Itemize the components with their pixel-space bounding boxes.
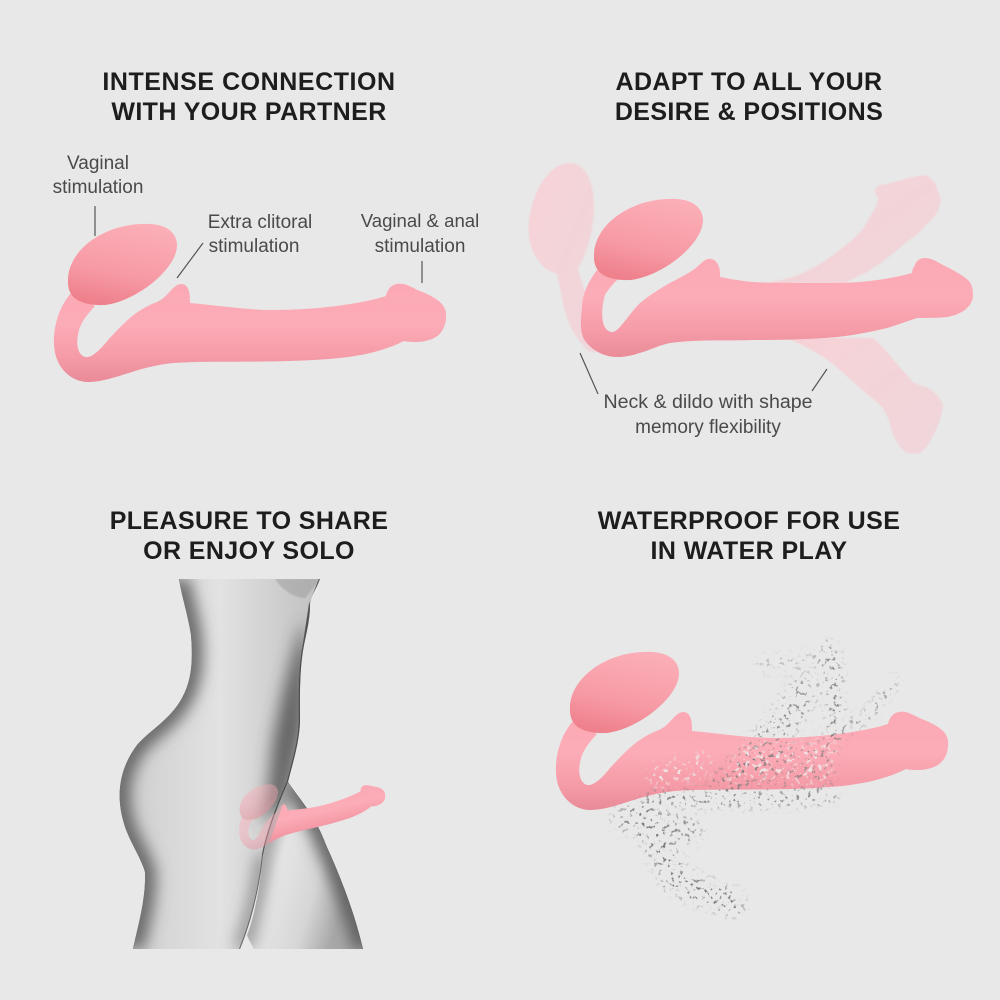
panel: adapt to positions — [529, 68, 973, 454]
heading: pleasure to share: OR ENJOY SOLO — [143, 537, 355, 565]
figure: grey body silhouette — [110, 575, 370, 955]
product worn, visible part — [269, 785, 386, 843]
label: neck and dildo flexibility: memory flexibility — [635, 417, 781, 438]
product worn, translucent part — [230, 759, 391, 852]
heading: pleasure to share: PLEASURE TO SHARE — [110, 507, 388, 535]
product illustration — [556, 652, 948, 810]
label: vaginal and anal stimulation — [361, 210, 479, 283]
label: vaginal stimulation: stimulation — [53, 177, 143, 198]
label: extra clitoral stimulation: stimulation — [209, 236, 299, 257]
panel: pleasure to share — [110, 507, 391, 955]
label: vaginal and anal stimulation: stimulation — [375, 236, 465, 257]
heading: intense connection: WITH YOUR PARTNER — [111, 98, 387, 126]
faded motion positions — [529, 163, 943, 454]
label: extra clitoral stimulation — [177, 212, 312, 278]
heading: adapt to all your desire: DESIRE & POSITIONS — [615, 98, 883, 126]
heading: waterproof: IN WATER PLAY — [651, 537, 847, 565]
label: neck and dildo flexibility — [580, 353, 827, 438]
heading: waterproof: WATERPROOF FOR USE — [598, 507, 900, 535]
heading: intense connection: INTENSE CONNECTION — [102, 68, 396, 96]
panel: intense connection — [53, 68, 479, 382]
label: vaginal and anal stimulation: Vaginal & anal — [361, 210, 479, 231]
heading: adapt to all your desire: ADAPT TO ALL YOUR — [615, 68, 883, 96]
label: neck and dildo flexibility: Neck & dildo with shape — [603, 391, 813, 413]
panel: waterproof — [556, 507, 948, 903]
label: vaginal stimulation: Vaginal — [67, 153, 129, 174]
water splash dark droplets — [625, 650, 893, 903]
product illustration — [54, 224, 446, 382]
label: vaginal stimulation — [53, 153, 143, 236]
main product illustration — [581, 199, 973, 357]
label: extra clitoral stimulation: Extra clitoral — [208, 212, 312, 233]
water splash light droplets — [660, 660, 835, 782]
